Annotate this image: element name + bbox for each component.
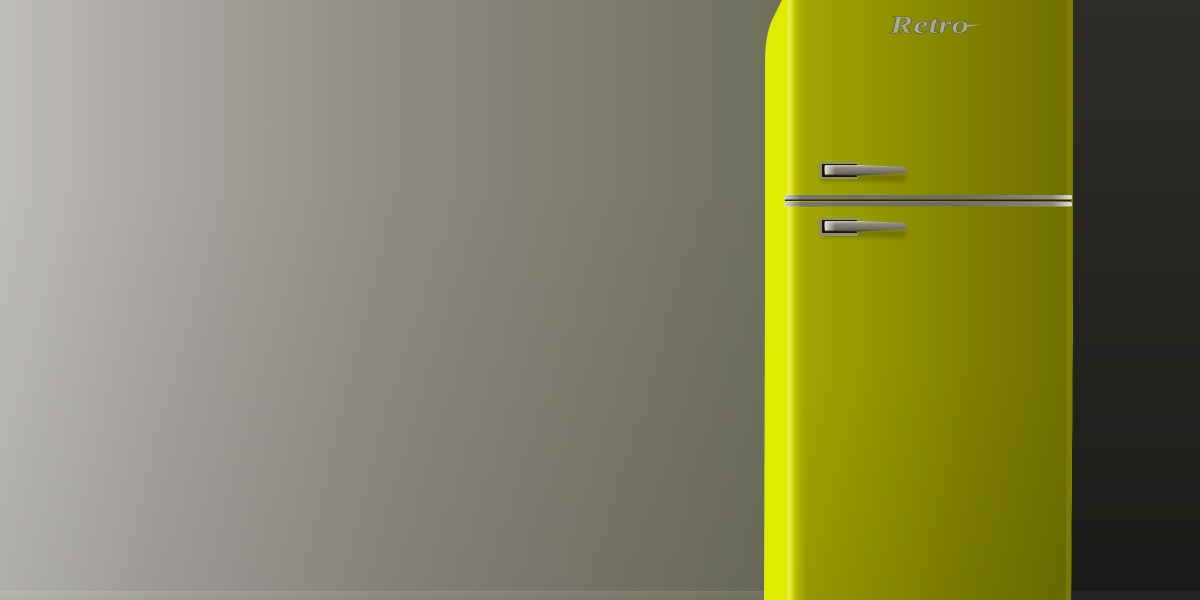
brand logo: Retro	[889, 12, 982, 39]
dark wall right of fridge	[1060, 0, 1200, 600]
brand logo: Retro: Retro	[889, 12, 969, 39]
wall background	[0, 0, 780, 600]
right edge rim	[1066, 0, 1073, 600]
skirting board	[0, 591, 1200, 600]
fridge body	[764, 0, 1073, 600]
front door panel	[787, 0, 1073, 600]
upper handle	[819, 162, 906, 181]
lower handle	[819, 218, 906, 237]
fridge	[764, 0, 1073, 600]
left edge highlight	[787, 0, 807, 600]
door gap trim	[784, 195, 1072, 206]
